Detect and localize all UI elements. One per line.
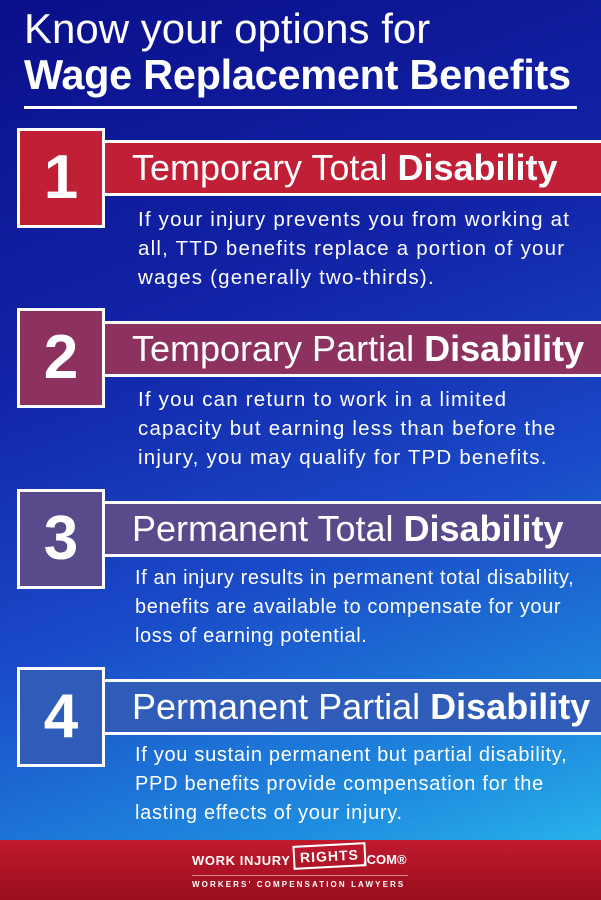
text 3: If an injury results in permanent total disability, — [135, 567, 574, 589]
banner 2 — [104, 321, 601, 377]
text 3: benefits are available to compensate for your — [135, 596, 561, 618]
text 3 — [135, 567, 574, 647]
title — [24, 5, 571, 98]
number 2: 2 — [44, 323, 78, 392]
text 2: If you can return to work in a limited — [138, 388, 507, 411]
title: Wage Replacement Benefits — [24, 51, 571, 98]
text 2 — [138, 388, 556, 469]
number 1 — [17, 128, 105, 228]
footer logo: .COM® — [363, 852, 407, 867]
section 2 — [17, 308, 601, 469]
text 4 — [135, 744, 567, 824]
text 4: PPD benefits provide compensation for the — [135, 773, 544, 795]
footer logo: WORK INJURY — [192, 853, 291, 868]
footer logo — [0, 840, 601, 900]
text 2: capacity but earning less than before the — [138, 417, 556, 440]
text 1: If your injury prevents you from working at — [138, 208, 570, 231]
text 1 — [138, 208, 570, 289]
banner 2: Temporary Partial Disability — [132, 328, 584, 369]
number 3: 3 — [44, 504, 78, 573]
section 4 — [17, 667, 601, 824]
text 4: If you sustain permanent but partial disability, — [135, 744, 567, 766]
text 3: loss of earning potential. — [135, 625, 367, 647]
banner 1 — [104, 140, 601, 196]
text 2: injury, you may qualify for TPD benefits. — [138, 446, 548, 469]
text 1: wages (generally two-thirds). — [138, 266, 435, 289]
footer logo: RIGHTS — [300, 846, 359, 866]
section 1 — [17, 128, 601, 289]
number 4 — [17, 667, 105, 767]
banner 1: Temporary Total Disability — [132, 147, 558, 188]
footer logo: WORKERS' COMPENSATION LAWYERS — [192, 880, 405, 889]
number 2 — [17, 308, 105, 408]
number 1: 1 — [44, 143, 78, 212]
title: Know your options for — [24, 5, 430, 52]
banner 4 — [104, 679, 601, 735]
banner 4: Permanent Partial Disability — [132, 686, 590, 727]
number 4: 4 — [44, 682, 78, 751]
text 4: lasting effects of your injury. — [135, 802, 403, 824]
section 3 — [17, 489, 601, 647]
banner 3 — [104, 501, 601, 557]
number 3 — [17, 489, 105, 589]
text 1: all, TTD benefits replace a portion of your — [138, 237, 565, 260]
banner 3: Permanent Total Disability — [132, 508, 564, 549]
